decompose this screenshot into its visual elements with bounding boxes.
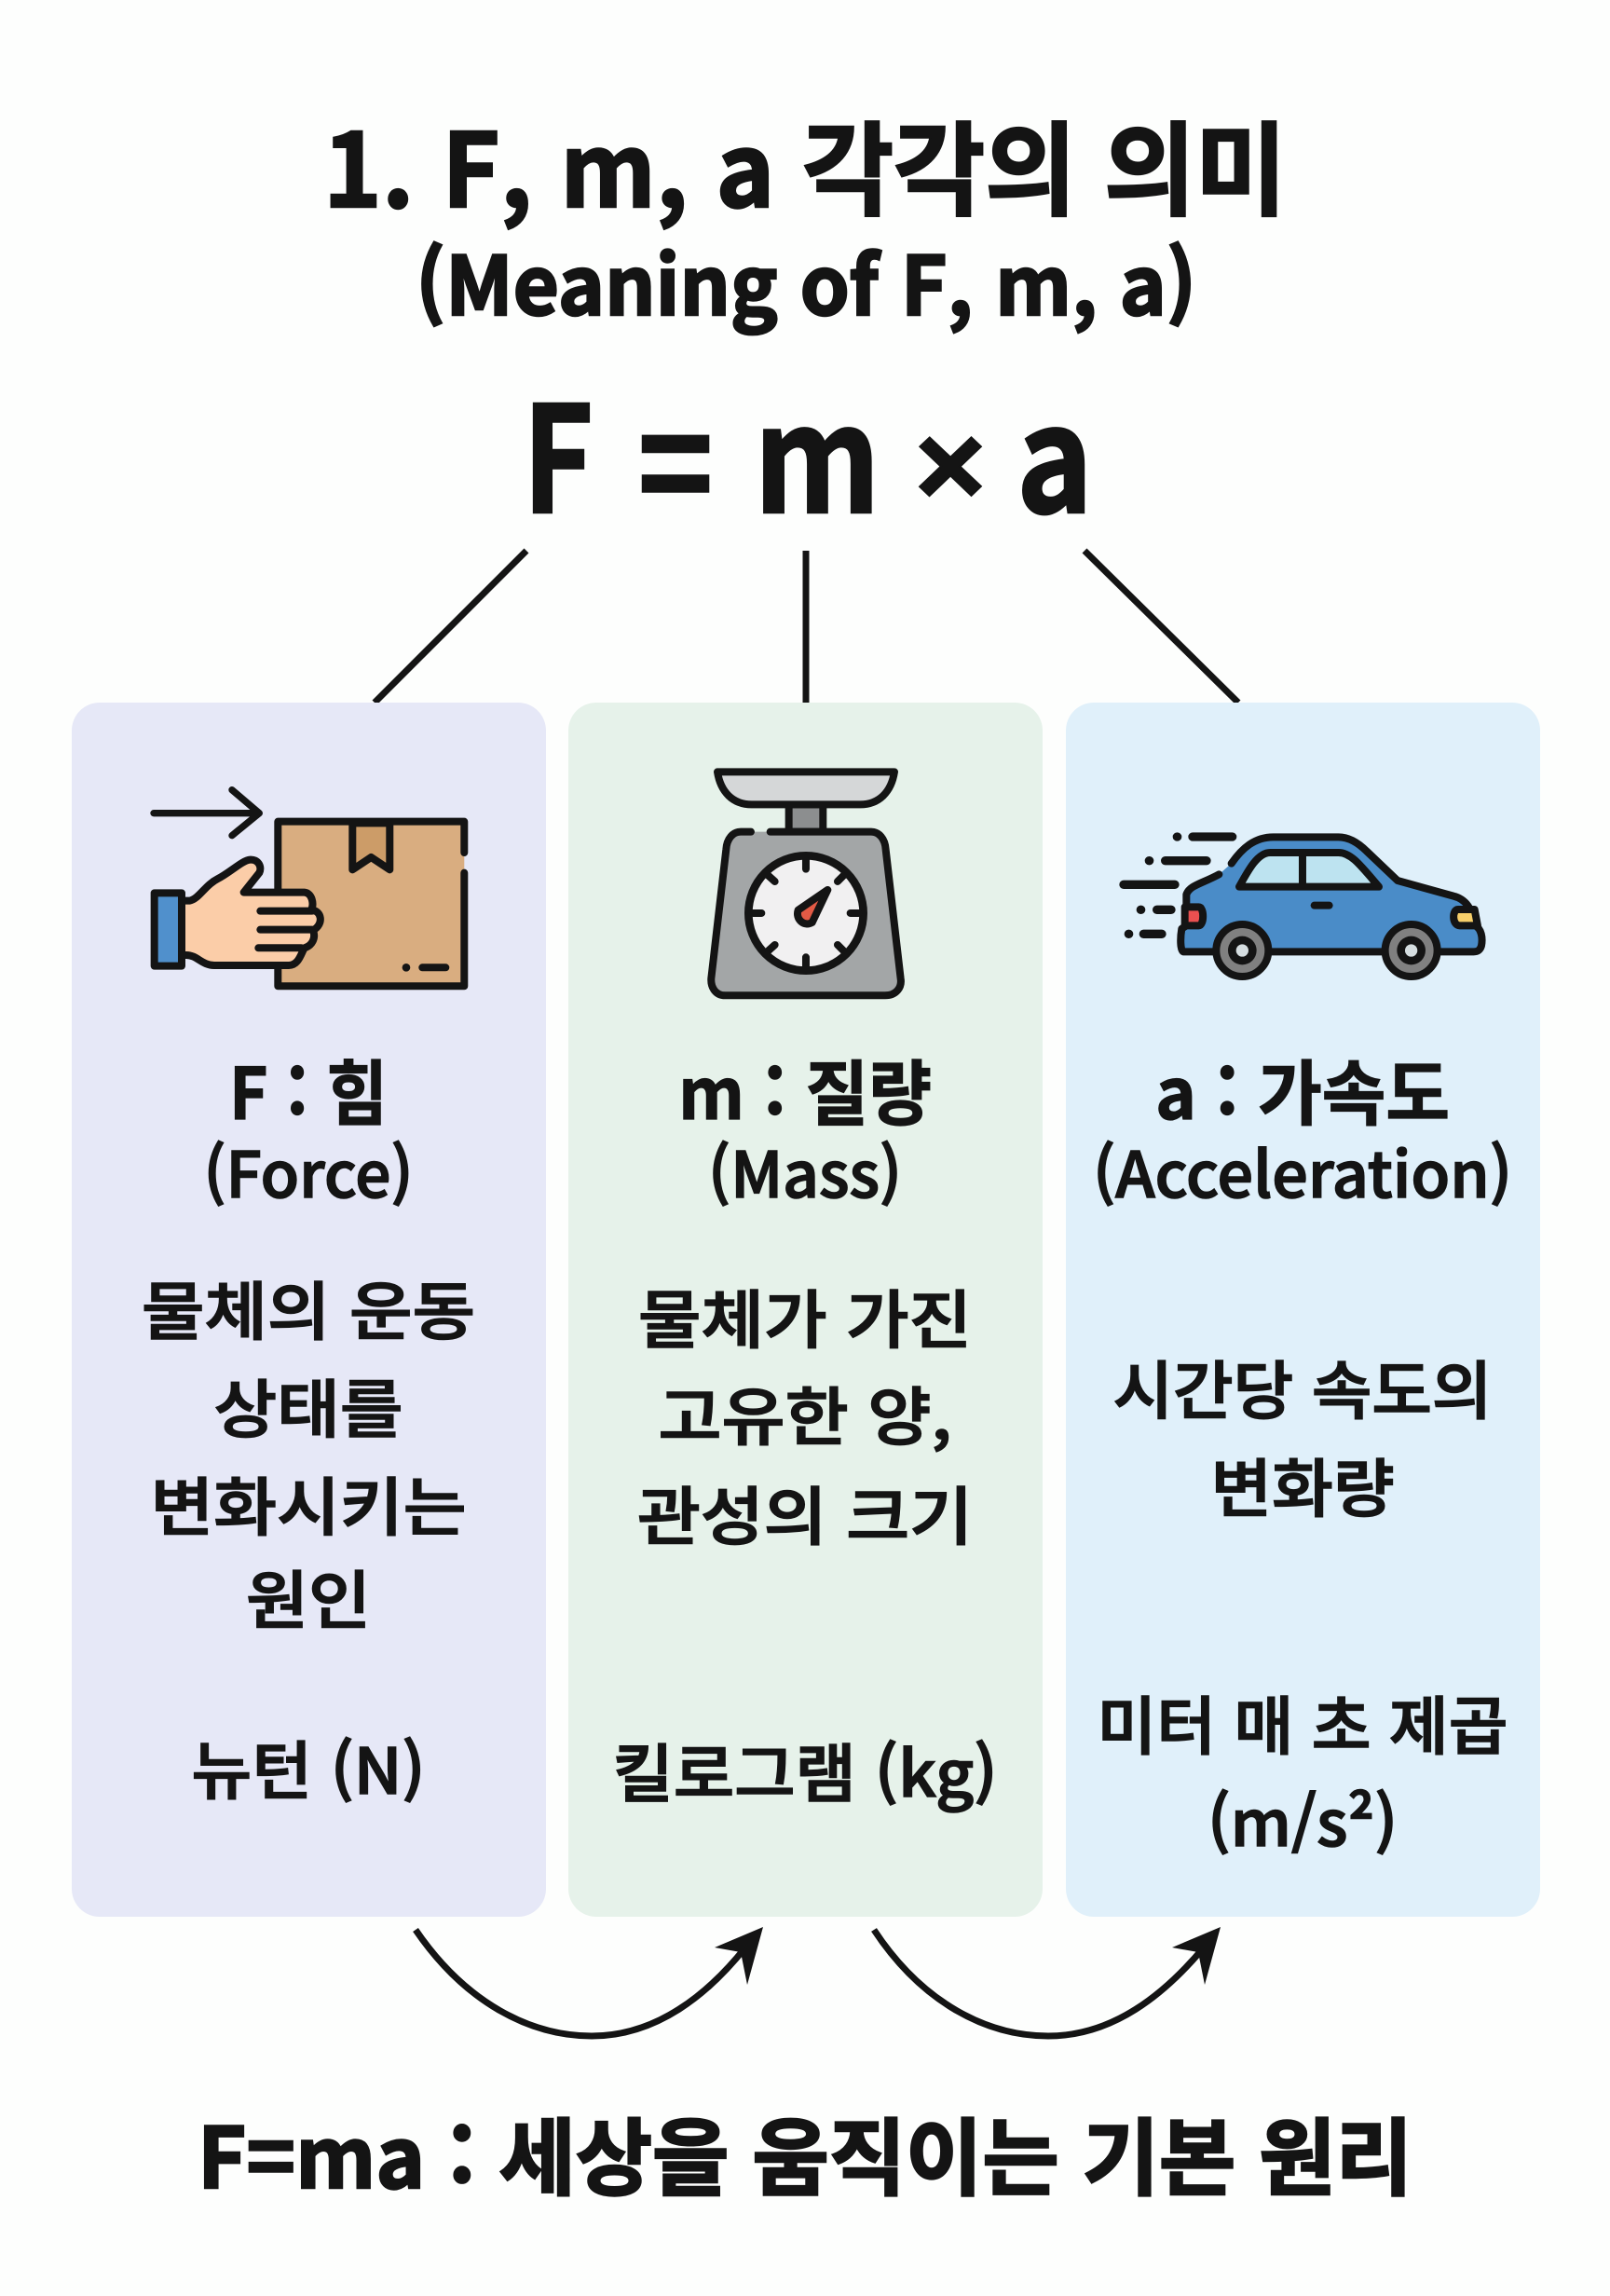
arrow: force to mass [416,1927,763,2036]
heading: mass [678,1037,932,1216]
description: force: 상태를 [214,1359,402,1451]
heading: mass: m : 질량 [678,1037,932,1140]
heading: force: F : 힘 [229,1037,388,1140]
description: mass [637,1269,973,1558]
heading: mass: (Mass) [708,1124,902,1216]
arrow: mass to acceleration [874,1927,1221,2036]
unit: metres per second squared: (m/s²) [1208,1772,1398,1865]
description: force [142,1261,475,1642]
icon: speeding car [1124,837,1482,977]
unit: newton: 뉴턴 (N) [192,1720,425,1812]
formula: = [637,380,714,544]
formula [523,342,1093,555]
panel: acceleration [1066,703,1540,1917]
connector lines [375,551,1238,703]
description: mass: 고유한 양, [658,1366,952,1458]
description: mass: 물체가 가진 [638,1269,972,1361]
description: force: 물체의 운동 [142,1261,475,1353]
panel: force [72,703,546,1917]
description: force: 변화시키는 [151,1456,466,1549]
subtitle: (Meaning of F, m, a) [416,222,1196,339]
heading: acceleration: (Acceleration) [1093,1124,1512,1216]
unit: metres per second squared [1098,1675,1508,1865]
panel: mass [568,703,1043,1917]
title: 1. F, m, a 각각의 의미 [323,90,1287,237]
heading: force [203,1037,414,1216]
description: acceleration: 변화량 [1211,1438,1394,1530]
formula: m [754,342,880,555]
formula: × [915,402,986,530]
heading: force: (Force) [203,1124,414,1216]
description: acceleration [1112,1340,1493,1530]
formula: a [1016,342,1093,555]
heading: acceleration [1093,1037,1512,1216]
footer statement: F=ma : 세상을 움직이는 기본 원리 [198,2091,1412,2212]
formula: F [523,342,594,555]
description: mass: 관성의 크기 [637,1466,973,1558]
icon: kitchen scale [711,772,901,995]
description: force: 원인 [246,1550,371,1642]
heading: acceleration: a : 가속도 [1155,1037,1450,1140]
unit: metres per second squared: 미터 매 초 제곱 [1098,1675,1508,1768]
description: acceleration: 시간당 속도의 [1112,1340,1493,1432]
icon: hand pushing box [154,790,464,986]
unit: kilogram: 킬로그램 (kg) [613,1723,997,1815]
